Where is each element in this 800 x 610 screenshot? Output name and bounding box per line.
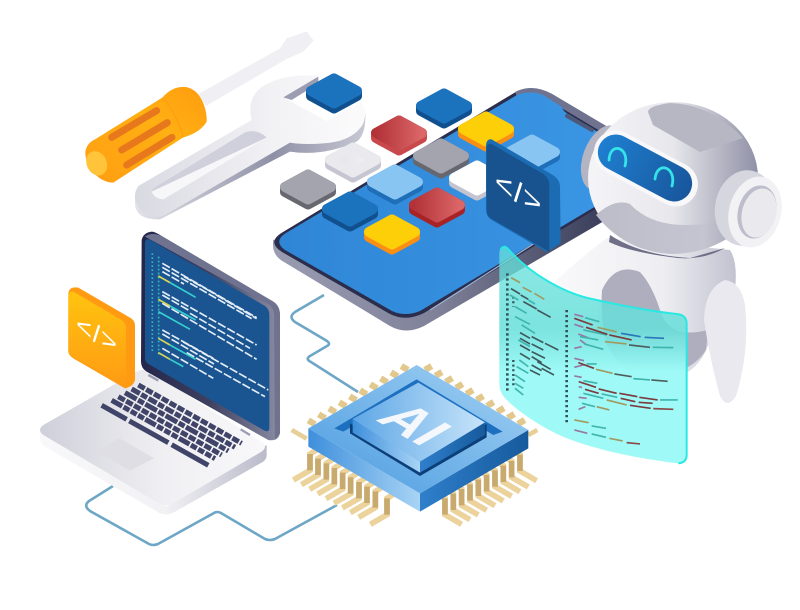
screwdriver <box>82 31 314 183</box>
chip body sides <box>308 428 420 512</box>
laptop code lines <box>152 253 268 397</box>
robot head <box>588 102 758 254</box>
robot right arm <box>704 280 746 403</box>
app tile: yellow on phone <box>369 220 415 250</box>
chip upper pins <box>308 366 525 424</box>
wrench side <box>135 113 365 219</box>
laptop hinge <box>148 375 250 435</box>
chip groove <box>334 379 503 435</box>
app tile: blue <box>421 94 467 124</box>
app tile: grey left <box>285 174 331 204</box>
panel code lines, right column <box>574 314 678 444</box>
robot right ear <box>709 165 781 251</box>
panel code lines, left column <box>510 278 558 395</box>
robot <box>553 102 789 403</box>
code symbol: </> <box>495 162 542 223</box>
phone <box>273 88 664 330</box>
panel line numbers <box>507 273 567 425</box>
laptop trackpad <box>96 438 154 471</box>
robot left ear <box>573 119 633 197</box>
wrench jaw inner wall <box>283 77 318 100</box>
AI chip <box>292 365 537 524</box>
handle grooves <box>112 111 172 165</box>
robot left shoulder and torso <box>553 238 736 380</box>
app tile: grey <box>418 144 464 174</box>
robot neck <box>609 235 725 258</box>
app tile: blue on wrench <box>311 78 357 108</box>
screwdriver handle <box>85 87 207 183</box>
panel glowing edge <box>501 247 687 463</box>
app tile: blue on phone <box>327 196 373 226</box>
robot eyes <box>609 148 673 186</box>
laptop screen back and bezel <box>141 232 280 440</box>
robot jaw <box>596 202 750 254</box>
phone screen <box>279 92 660 314</box>
code symbol: </> <box>76 309 118 361</box>
wrench handle recess <box>152 131 267 198</box>
phone highlight <box>430 243 535 310</box>
phone speaker <box>567 116 592 130</box>
robot visor <box>586 123 706 214</box>
robot torso shadow <box>602 269 708 385</box>
wrench <box>135 75 365 219</box>
chip lower right pins <box>435 449 537 524</box>
app tile: light blue <box>372 170 418 200</box>
chip body top <box>308 365 528 493</box>
screwdriver shaft <box>198 31 314 106</box>
phone bezel <box>274 88 664 318</box>
laptop base side <box>40 430 267 514</box>
laptop <box>40 232 280 514</box>
wrench face <box>135 75 365 217</box>
AI label: AI <box>364 395 466 453</box>
handle collar <box>163 97 183 137</box>
wire: laptop to chip <box>86 486 337 545</box>
app tile: red <box>376 120 422 150</box>
robot head top patch <box>648 103 743 152</box>
phone side edge <box>273 170 640 330</box>
panel glass <box>499 246 687 463</box>
app tile: white <box>454 166 500 196</box>
code card: orange <box>68 287 135 388</box>
laptop base top <box>40 370 265 505</box>
handle end cap <box>82 148 111 179</box>
code card: blue <box>486 139 561 252</box>
app tile: light blue right <box>509 140 555 170</box>
chip core <box>350 423 487 476</box>
laptop screen <box>145 239 269 431</box>
laptop keyboard <box>102 385 242 465</box>
app tile: light grey <box>330 148 376 178</box>
chip lower left pins <box>293 449 395 524</box>
wire: phone to chip <box>292 295 358 392</box>
app tile: red on phone <box>414 192 460 222</box>
app tile: yellow top <box>463 116 509 146</box>
holographic code panel <box>499 246 687 463</box>
